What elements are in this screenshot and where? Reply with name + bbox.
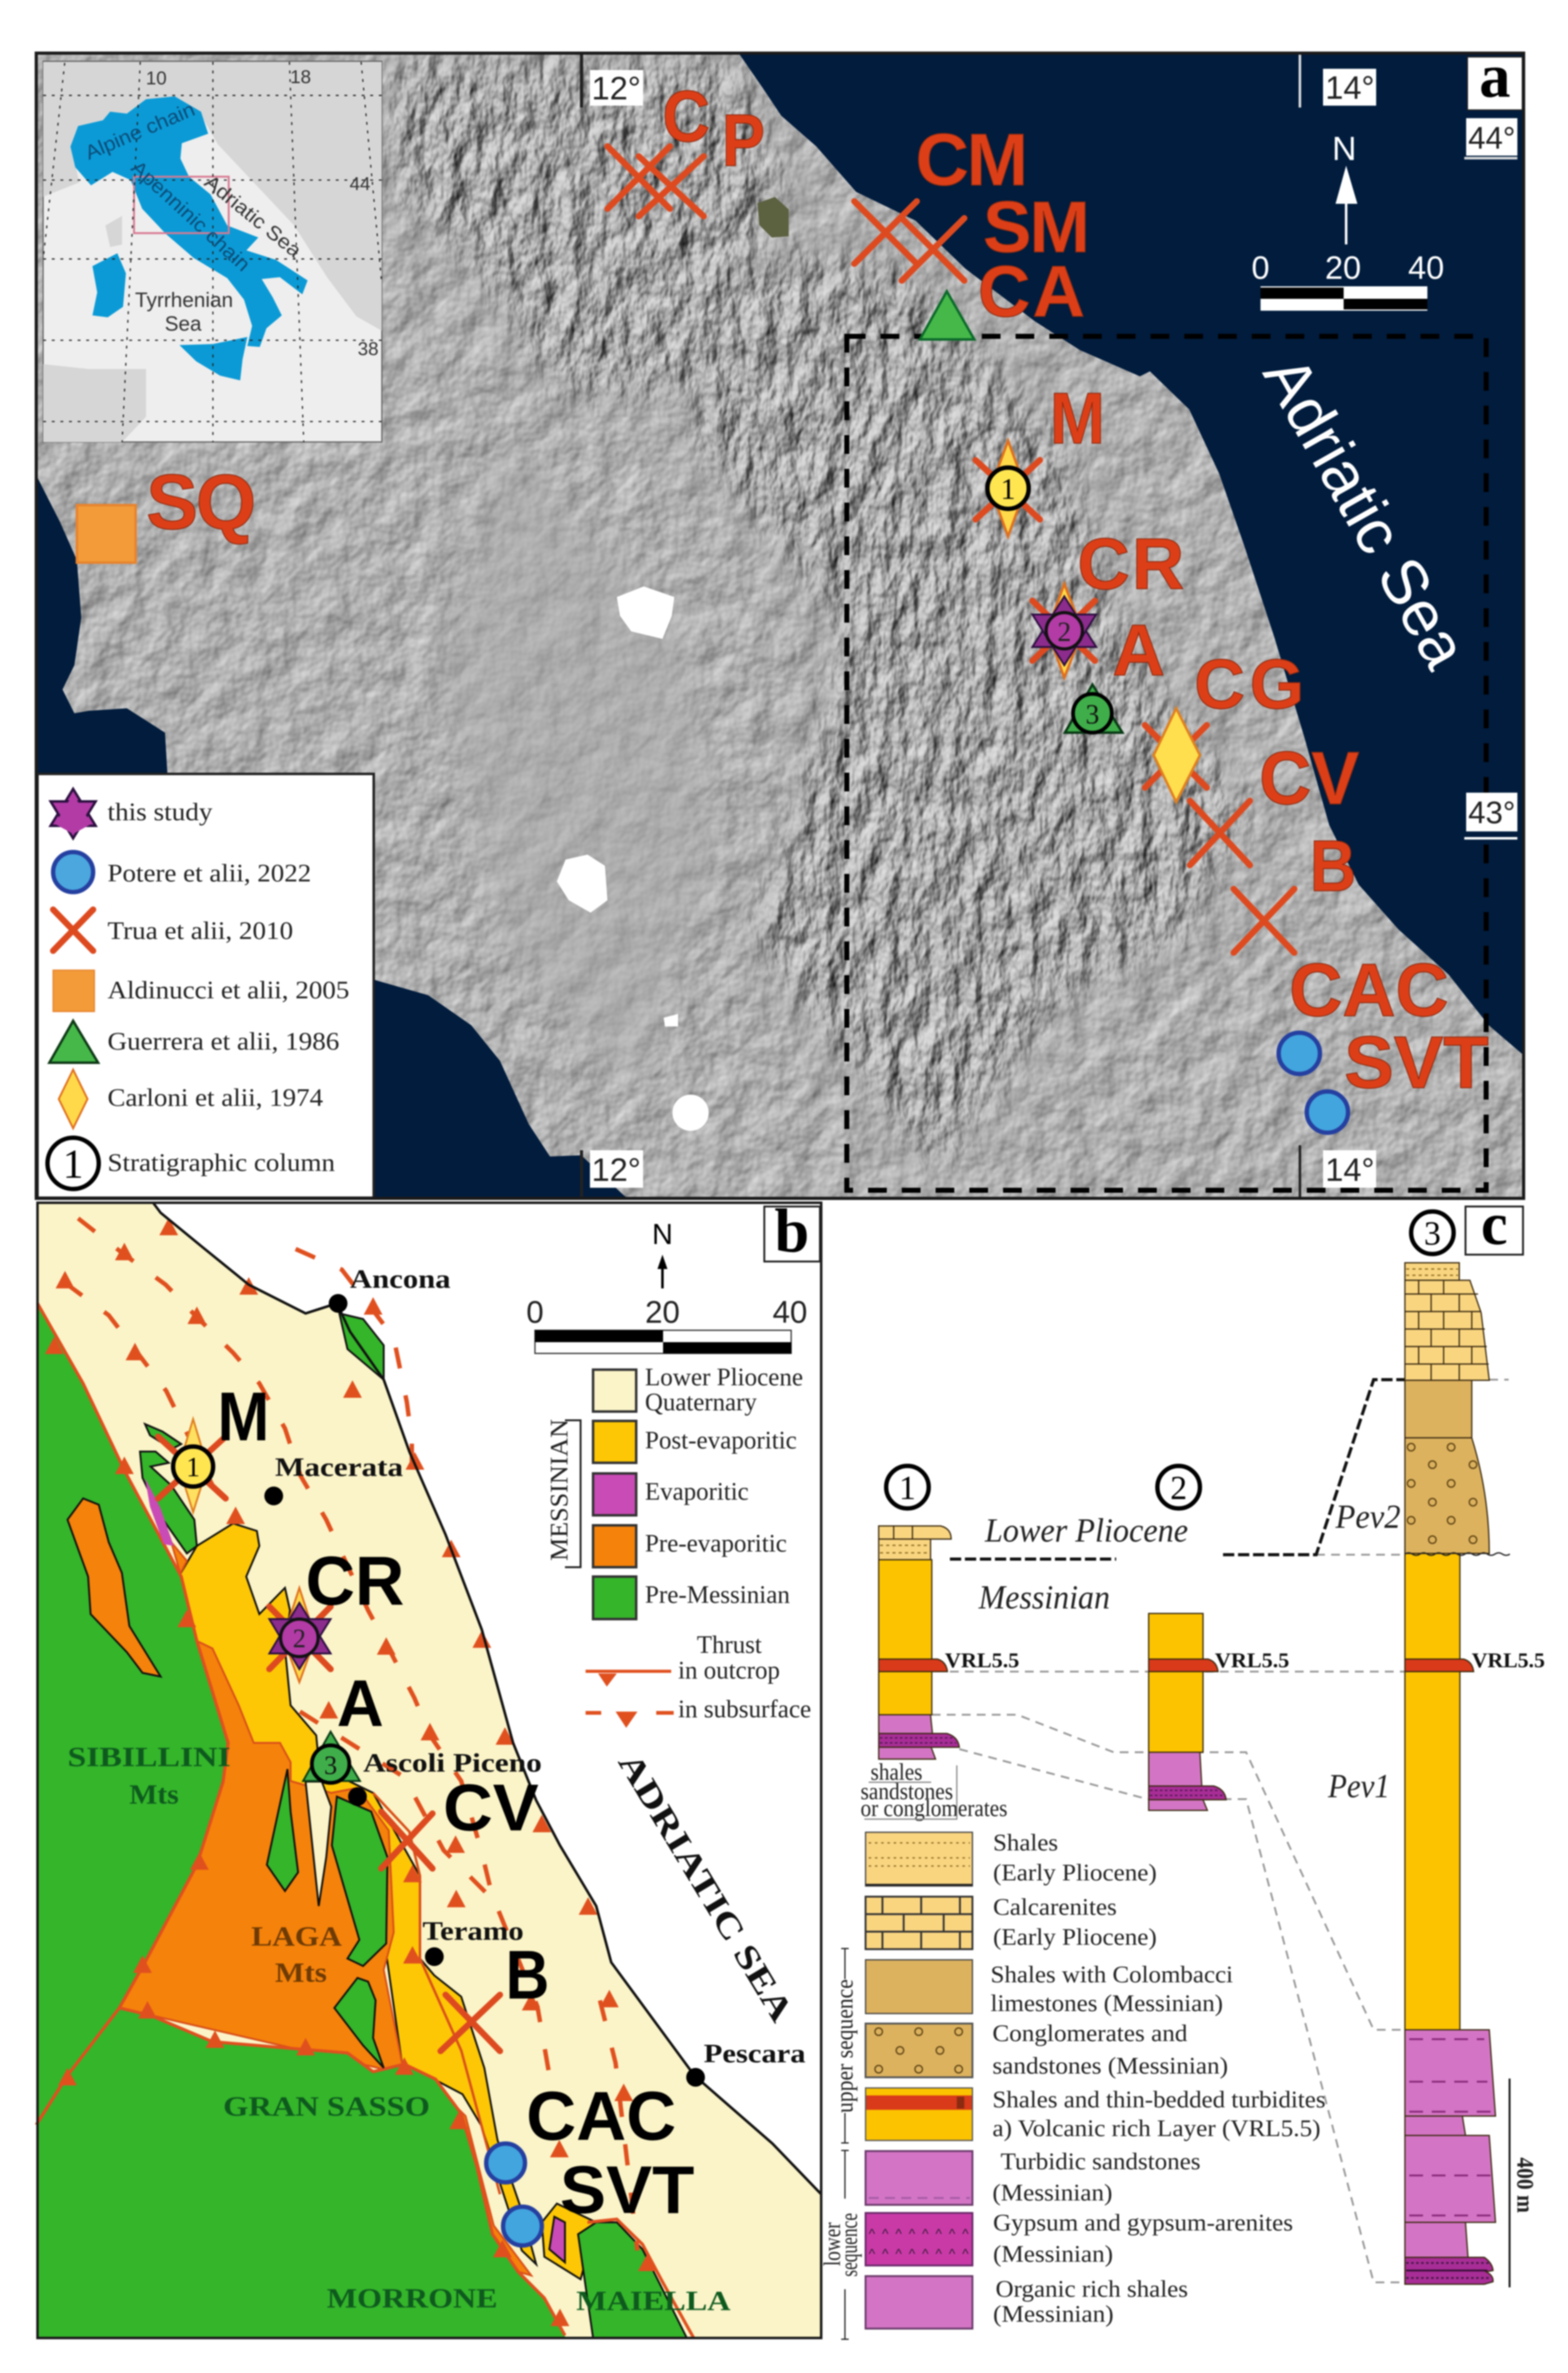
north arrow: N (1332, 130, 1356, 168)
thrust teeth (45, 1218, 657, 2326)
site marker: column 2: 2 (1057, 616, 1071, 647)
thrust: southern front (119, 2008, 565, 2335)
lower sequence bracket: lower (819, 2222, 846, 2266)
massif labels: MORRONE (327, 2283, 497, 2314)
panel c: stratigraphic columns (819, 1190, 1545, 2339)
scale bar: 40 (1408, 250, 1444, 286)
swatch: turbidic sandstones (866, 2151, 972, 2205)
site labels on map b: A (337, 1667, 384, 1740)
panel letter c (1466, 1190, 1523, 1257)
thrust: western main (36, 1303, 228, 2125)
site marker: CG diamond and cross (1145, 708, 1207, 802)
stage labels: Pev2 (1335, 1498, 1401, 1535)
swatch: conglomerates (866, 2024, 972, 2077)
graticule label: 44: 44° (1468, 121, 1516, 156)
text: organic rich shales (993, 2276, 1188, 2327)
inset labels: 10 (146, 68, 167, 89)
text: Colombacci shales: limestones (Messinian) (991, 1990, 1223, 2017)
text: calcarenites: Calcarenites (993, 1894, 1117, 1920)
evaporitic sliver (145, 1478, 174, 1546)
panel letter c: c (1481, 1190, 1507, 1257)
legend text: Carloni: Carloni et alii, 1974 (107, 1083, 323, 1111)
inset labels: Alpine chain (82, 98, 198, 164)
swatch: gypsum: ^^^^^^^^ (869, 2226, 969, 2242)
massif labels: SIBILLINI (67, 1742, 231, 1772)
inset labels: Adriatic Sea (201, 170, 306, 262)
VRL labels: VRL5.5 (1472, 1649, 1545, 1672)
graticule tick: 12 top: 12° (592, 71, 641, 107)
text: conglomerates: Conglomerates and (992, 2020, 1187, 2047)
map frame (36, 53, 1524, 1198)
sea label: ADRIATIC SEA (611, 1746, 801, 2028)
site labels: CA (978, 251, 1085, 332)
column marker 1 on map (158, 1419, 226, 1512)
column marker 3 on map (303, 1732, 360, 1783)
site labels: CR (1077, 523, 1184, 605)
graticule tick: 14 top: 14° (1326, 70, 1374, 106)
panel letter a: a (1479, 41, 1511, 111)
column 1: grouped lithology note: sandstones (861, 1778, 953, 1805)
text: shales with volcanic layer (992, 2087, 1326, 2142)
column 1 (879, 1466, 959, 1759)
city labels: Ascoli Piceno (363, 1749, 542, 1778)
inset: surrounding land (43, 62, 382, 442)
column 1: grouped lithology note: shales (871, 1759, 922, 1785)
legend icon: cross (53, 910, 93, 951)
unconformity wave (1405, 1553, 1510, 1555)
orange lens: Sibillini (67, 1498, 161, 1677)
site marker: Guerrera triangle CA (920, 291, 974, 339)
city labels: Teramo (422, 1917, 524, 1946)
site marker: CV cross (1190, 801, 1250, 865)
panel a: shaded relief map (36, 41, 1524, 1198)
swatch: calcarenites (866, 1897, 972, 1949)
city labels: Macerata (275, 1453, 403, 1482)
Maiella green (578, 2222, 687, 2338)
massif labels: Mts (275, 1957, 327, 1988)
text: shales: Shales (993, 1830, 1058, 1856)
site labels: SQ (146, 459, 256, 546)
massif labels: GRAN SASSO (223, 2091, 430, 2122)
inset: Sardinia (92, 253, 126, 318)
swatch: shales with volcanic layer (866, 2088, 972, 2140)
VRL labels: VRL5.5 (945, 1649, 1019, 1672)
column 1: circle label (886, 1466, 929, 1508)
text: shales (993, 1830, 1157, 1886)
column 3: circle label (1411, 1212, 1454, 1254)
land relief (36, 53, 1524, 1198)
legend icon: star (51, 789, 96, 838)
correlation dashed lines (932, 1380, 1509, 2282)
VRL labels: VRL5.5 (1215, 1649, 1289, 1672)
massif labels: LAGA (251, 1921, 342, 1952)
scale bar b: 0 (526, 1295, 544, 1330)
unit: Post-evaporitic (179, 1523, 536, 2264)
column 1: grouped lithology note: or conglomerates (861, 1795, 1007, 1822)
lithology legend (819, 1830, 1326, 2339)
text: conglomerates: sandstones (Messinian) (992, 2053, 1228, 2079)
inset: Italy mainland (71, 96, 307, 347)
scale bar: 20 (1325, 250, 1361, 286)
swatch: Colombacci shales (866, 1960, 972, 2014)
graticule tick: 14 bottom: 14° (1326, 1152, 1374, 1188)
swatch: gypsum (866, 2213, 972, 2265)
legend text: Guerrera: Guerrera et alii, 1986 (107, 1027, 339, 1055)
swatch: shales (866, 1832, 972, 1886)
legend: geological units: MESSINIAN (545, 1419, 573, 1561)
site marker: column 1: 1 (1001, 473, 1016, 506)
column marker 2 on map: 2 (292, 1625, 306, 1653)
stage labels: Lower Pliocene (984, 1512, 1188, 1549)
column 3: conglomerates (1405, 1438, 1489, 1553)
site labels on map b: CR (306, 1543, 404, 1620)
column 2 (1149, 1466, 1226, 1810)
legend: geological units: Lower Pliocene (645, 1363, 803, 1391)
lower sequence bracket: sequence (836, 2213, 862, 2277)
panel letter b: b (774, 1196, 809, 1265)
legend: thrust symbols: Thrust (697, 1630, 762, 1658)
thickness scale: 400 m (1512, 2157, 1538, 2213)
site markers: Trua crosses CM SM (854, 201, 964, 281)
sea: southern Tyrrhenian (369, 975, 628, 1198)
graticule tick: 12 top (580, 53, 643, 108)
column 2: circle label: 2 (1170, 1469, 1187, 1507)
site marker: B cross (1234, 889, 1294, 953)
north arrow b (652, 1218, 673, 1288)
Ancona green lens (339, 1313, 384, 1380)
lakes (557, 586, 709, 1131)
text: gypsum: (Messinian) (993, 2241, 1113, 2267)
legend text: Aldinucci: Aldinucci et alii, 2005 (107, 976, 349, 1004)
site labels: SM (983, 186, 1090, 268)
legend: geological units: Pre-evaporitic (645, 1529, 787, 1557)
city labels (275, 1265, 806, 2069)
text: organic rich shales: (Messinian) (993, 2301, 1114, 2327)
column 1: grouped lithology note (861, 1759, 1007, 1822)
dashed study area box (847, 336, 1486, 1190)
text: shales with volcanic layer: Shales and thin-bedded turbidites (992, 2087, 1326, 2113)
VRL labels (945, 1649, 1545, 1672)
site labels: B (1310, 825, 1356, 906)
column 1: circle label: 1 (899, 1469, 916, 1507)
Maiella yellow (542, 2204, 596, 2279)
site labels: CM (916, 119, 1028, 201)
site labels: CG (1194, 645, 1304, 723)
legend: geological units: Pre-Messinian (645, 1580, 790, 1608)
site labels: C (662, 76, 710, 157)
text: Colombacci shales (991, 1962, 1233, 2017)
swatch: gypsum: ^^^^^^^^ (869, 2246, 969, 2262)
north arrow b: N (652, 1218, 673, 1250)
legend: geological units: Quaternary (645, 1388, 757, 1416)
site labels on map b: SVT (560, 2152, 694, 2227)
text: calcarenites: (Early Pliocene) (993, 1924, 1157, 1950)
site marker: CAC circle (1279, 1033, 1320, 1074)
legend icon: square (53, 970, 94, 1011)
site labels (146, 76, 1489, 1104)
inset labels: 44 (349, 174, 371, 194)
inset labels: Tyrrhenian (135, 288, 233, 311)
site markers: Trua crosses CP (607, 146, 704, 216)
thrust: foothill (373, 1793, 500, 2194)
column 2: circle label (1157, 1466, 1200, 1508)
inset: study area box (134, 177, 229, 233)
legend icon: circle (53, 852, 93, 892)
site labels: CAC (1289, 948, 1449, 1032)
city dots (264, 1294, 705, 2087)
text: gypsum (993, 2210, 1293, 2267)
text: shales: (Early Pliocene) (993, 1860, 1157, 1886)
text: turbidic sandstones (992, 2149, 1201, 2206)
inner green lens 1 (267, 1769, 298, 1891)
map b crosses (381, 1812, 500, 2051)
scale bar (1252, 250, 1444, 311)
legend icon: numbered circle (47, 1138, 99, 1189)
legend: site sources (37, 774, 374, 1198)
graticule label: 43 (1464, 793, 1517, 840)
text: organic rich shales: Organic rich shales (996, 2276, 1188, 2302)
panel letter b (764, 1196, 820, 1265)
legend text: Potere: Potere et alii, 2022 (107, 859, 311, 887)
thrust: Maiella (587, 2219, 694, 2338)
graticule tick: 14 top (1299, 53, 1376, 108)
thickness scale (1509, 2079, 1538, 2287)
text: shales with volcanic layer: a) Volcanic rich Layer (VRL5.5) (992, 2115, 1321, 2142)
subsurface thrust dashes (65, 1218, 637, 2250)
legend: geological units (545, 1363, 803, 1619)
Adriatic Sea label: Adriatic Sea (1250, 344, 1482, 680)
green patch (757, 197, 789, 238)
site labels: SVT (1344, 1021, 1489, 1104)
text: calcarenites (993, 1894, 1157, 1950)
inset: Sicily (179, 337, 247, 381)
site marker: column 1 (976, 441, 1040, 536)
massif labels: Mts (129, 1779, 179, 1810)
column marker 2 on map (269, 1588, 331, 1682)
column 3 (1405, 1212, 1496, 2284)
legend icon: diamond (59, 1070, 87, 1128)
inner green lens 3 (334, 1978, 384, 2068)
text: conglomerates (992, 2020, 1228, 2079)
legend icon: numbered circle: 1 (62, 1141, 84, 1187)
site marker: column 2 (1032, 584, 1096, 678)
legend text: this study: this study (107, 798, 212, 826)
legend: geological units: Post-evaporitic (645, 1426, 797, 1454)
stage labels: Pev1 (1327, 1767, 1390, 1805)
legend: thrust symbols: in outcrop (678, 1656, 780, 1684)
column 3: calcarenites (1405, 1280, 1489, 1380)
legend: geological units: Evaporitic (645, 1477, 749, 1505)
panel b: geological map (36, 1196, 821, 2338)
site labels on map b: CAC (526, 2078, 676, 2155)
legend text: column: Stratigraphic column (107, 1148, 335, 1176)
coast line (161, 1213, 821, 2194)
graticule label: 43: 43° (1468, 795, 1516, 830)
text: gypsum: Gypsum and gypsum-arenites (993, 2210, 1293, 2236)
swatch: organic rich shales (866, 2276, 972, 2329)
site labels: CV (1259, 736, 1359, 820)
unit: Lower Pliocene and Quaternary (37, 1203, 821, 2338)
site labels: M (1050, 378, 1105, 459)
inner cream strip (306, 1782, 331, 1906)
inset labels (82, 67, 379, 359)
text: Colombacci shales: Shales with Colombacci (991, 1962, 1233, 1988)
inset labels: Apenninic chain (127, 156, 254, 276)
north arrow (1332, 130, 1357, 244)
inset labels: 38 (357, 339, 379, 359)
legend icon: triangle (49, 1021, 98, 1063)
text: turbidic sandstones: (Messinian) (992, 2180, 1112, 2206)
sea: Tyrrhenian (36, 475, 167, 775)
site labels on map b: CV (443, 1771, 539, 1845)
site marker: column 3: 3 (1086, 699, 1099, 730)
site marker: SVT circle (1307, 1091, 1348, 1133)
green north sliver (145, 1424, 181, 1449)
stage labels (978, 1498, 1401, 1805)
Maiella evaporitic (549, 2217, 565, 2262)
green north outlier (140, 1452, 197, 1553)
legend: thrust symbols: in subsurface (678, 1695, 811, 1723)
massif labels (67, 1742, 731, 2316)
column marker 3 on map: 3 (324, 1752, 337, 1780)
unit: Pre-Messinian (37, 1303, 565, 2338)
lower sequence bracket (819, 2150, 862, 2339)
column marker 1 on map: 1 (186, 1452, 200, 1482)
city labels: Pescara (704, 2040, 806, 2069)
panel letter a (1467, 41, 1522, 111)
scale bar b: 40 (772, 1295, 807, 1330)
scale bar b: 20 (645, 1295, 680, 1330)
site labels: A (1112, 610, 1165, 691)
site labels on map b (217, 1378, 694, 2227)
site labels: P (722, 99, 765, 182)
city labels: Ancona (350, 1265, 451, 1294)
stage labels: Messinian (978, 1578, 1110, 1616)
scale bar b (526, 1295, 807, 1353)
sea: Adriatic (739, 53, 1524, 1055)
upper sequence bracket: upper sequence (832, 1979, 858, 2113)
column 3: circle label: 3 (1424, 1215, 1441, 1252)
inset labels: 18 (290, 67, 311, 88)
massif labels: MAIELLA (576, 2285, 731, 2316)
inset map of Italy (43, 61, 382, 442)
inset labels: Sea (165, 312, 202, 335)
site marker: column 3 (1065, 685, 1122, 733)
panel b frame (37, 1203, 821, 2338)
scale bar: 0 (1252, 250, 1269, 286)
stage boundary dashed lines (950, 1380, 1405, 1559)
graticule tick: 14 bottom (1299, 1145, 1376, 1198)
text: turbidic sandstones: Turbidic sandstones (1001, 2149, 1201, 2175)
legend: thrust symbols (586, 1630, 811, 1728)
graticule tick: 12 bottom (580, 1150, 643, 1198)
legend text: Trua: Trua et alii, 2010 (107, 916, 293, 945)
inner green lens 2 (332, 1797, 387, 1966)
site labels on map b: B (506, 1937, 549, 2014)
map b circles (486, 2144, 542, 2245)
site labels on map b: M (217, 1378, 269, 1455)
unit: Pre-evaporitic (119, 1542, 531, 2275)
graticule tick: 12 bottom: 12° (592, 1152, 641, 1188)
site marker: Aldinucci square SQ (77, 505, 136, 563)
